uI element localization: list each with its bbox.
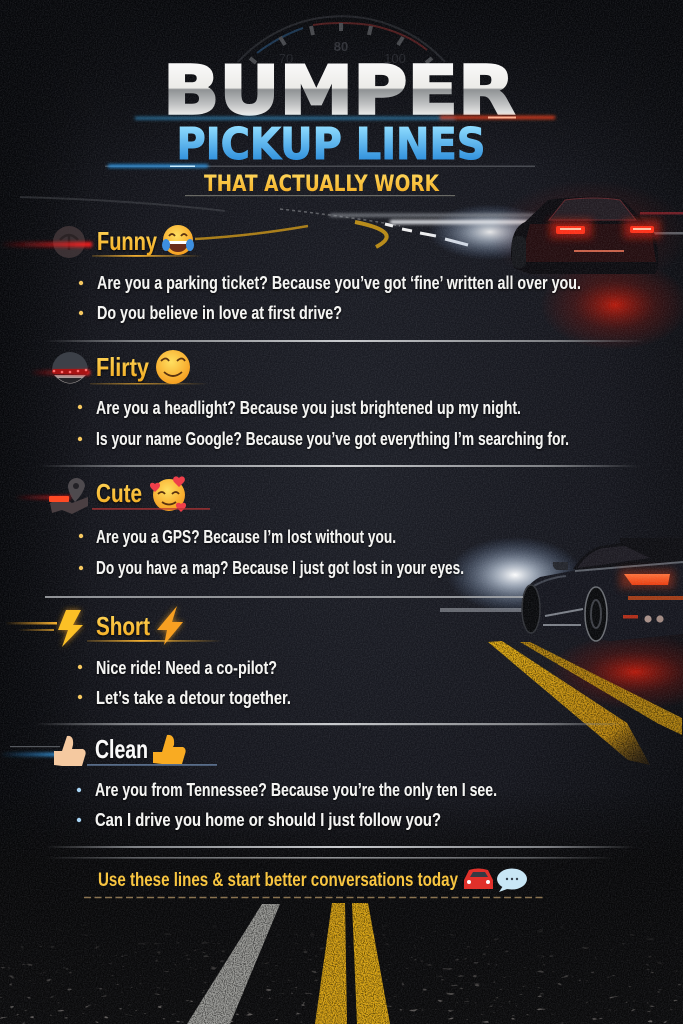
body	[523, 562, 683, 641]
icon: thumbs up with blue streak	[0, 736, 86, 766]
speedometer gauge: 80	[334, 39, 348, 54]
section: Cute	[15, 476, 464, 578]
emoji: thumbs up yellow	[153, 735, 186, 764]
bullet list: Do you have a map? Because I just got lost in your eyes.	[96, 558, 464, 578]
bullet list	[78, 398, 569, 449]
title word: BUMPER: BUMPER	[163, 52, 515, 130]
footer call to action: Use these lines & start better conversations today	[98, 869, 458, 891]
speedometer gauge	[238, 16, 445, 66]
bullet list	[77, 780, 497, 830]
heading: Cute	[96, 478, 142, 508]
wheels	[522, 585, 607, 641]
emoji: laughing with tears	[162, 225, 194, 255]
road curve top	[20, 197, 468, 247]
heading: Flirty	[96, 352, 149, 382]
heading: Short	[96, 611, 150, 641]
icon: map pin	[15, 478, 88, 514]
section: Funny	[0, 225, 581, 323]
bullet list	[78, 658, 291, 708]
icon: lightning bolt right	[157, 606, 183, 645]
bullet list: Let’s take a detour together.	[96, 688, 291, 708]
subtitle: THAT ACTUALLY WORK	[204, 172, 440, 197]
title words: PICKUP LINES: PICKUP LINES	[176, 119, 486, 170]
heading: Clean	[95, 734, 148, 764]
title	[105, 52, 555, 197]
bullet list	[79, 527, 464, 578]
speedometer gauge: 100	[384, 51, 406, 66]
car: bottom right dark sports car	[440, 535, 683, 710]
icon: lightning bolt with streaks	[5, 610, 83, 647]
emoji: speech bubble	[497, 868, 527, 892]
car: top right red sedan	[330, 180, 683, 350]
icon: steering wheel with red streak	[0, 226, 92, 258]
road lanes bottom	[187, 903, 390, 1024]
icon: headlight dome	[30, 352, 90, 384]
bullet list: Can I drive you home or should I just follow you?	[95, 810, 441, 830]
bullet list: Are you a GPS? Because I’m lost without you.	[96, 527, 396, 547]
bullet list	[79, 273, 581, 323]
bullet list: Are you a headlight? Because you just brightened up my night.	[96, 398, 521, 418]
road lines right yellow	[488, 641, 682, 765]
title glow line red blue	[135, 116, 555, 120]
section: Clean	[0, 734, 497, 830]
title glow line blue	[105, 164, 535, 168]
bullet list: Nice ride! Need a co-pilot?	[96, 658, 277, 678]
section: Short	[5, 606, 291, 708]
speedometer gauge: 70	[279, 51, 293, 66]
heading: Funny	[97, 226, 157, 256]
emoji: smiling with hearts	[150, 476, 186, 512]
emoji: red car	[464, 868, 493, 889]
bullet list: Are you from Tennessee? Because you’re the only ten I see.	[95, 780, 497, 800]
section: Flirty	[30, 350, 569, 449]
bullet list: Do you believe in love at first drive?	[97, 303, 342, 323]
emoji: smiling	[156, 350, 190, 384]
